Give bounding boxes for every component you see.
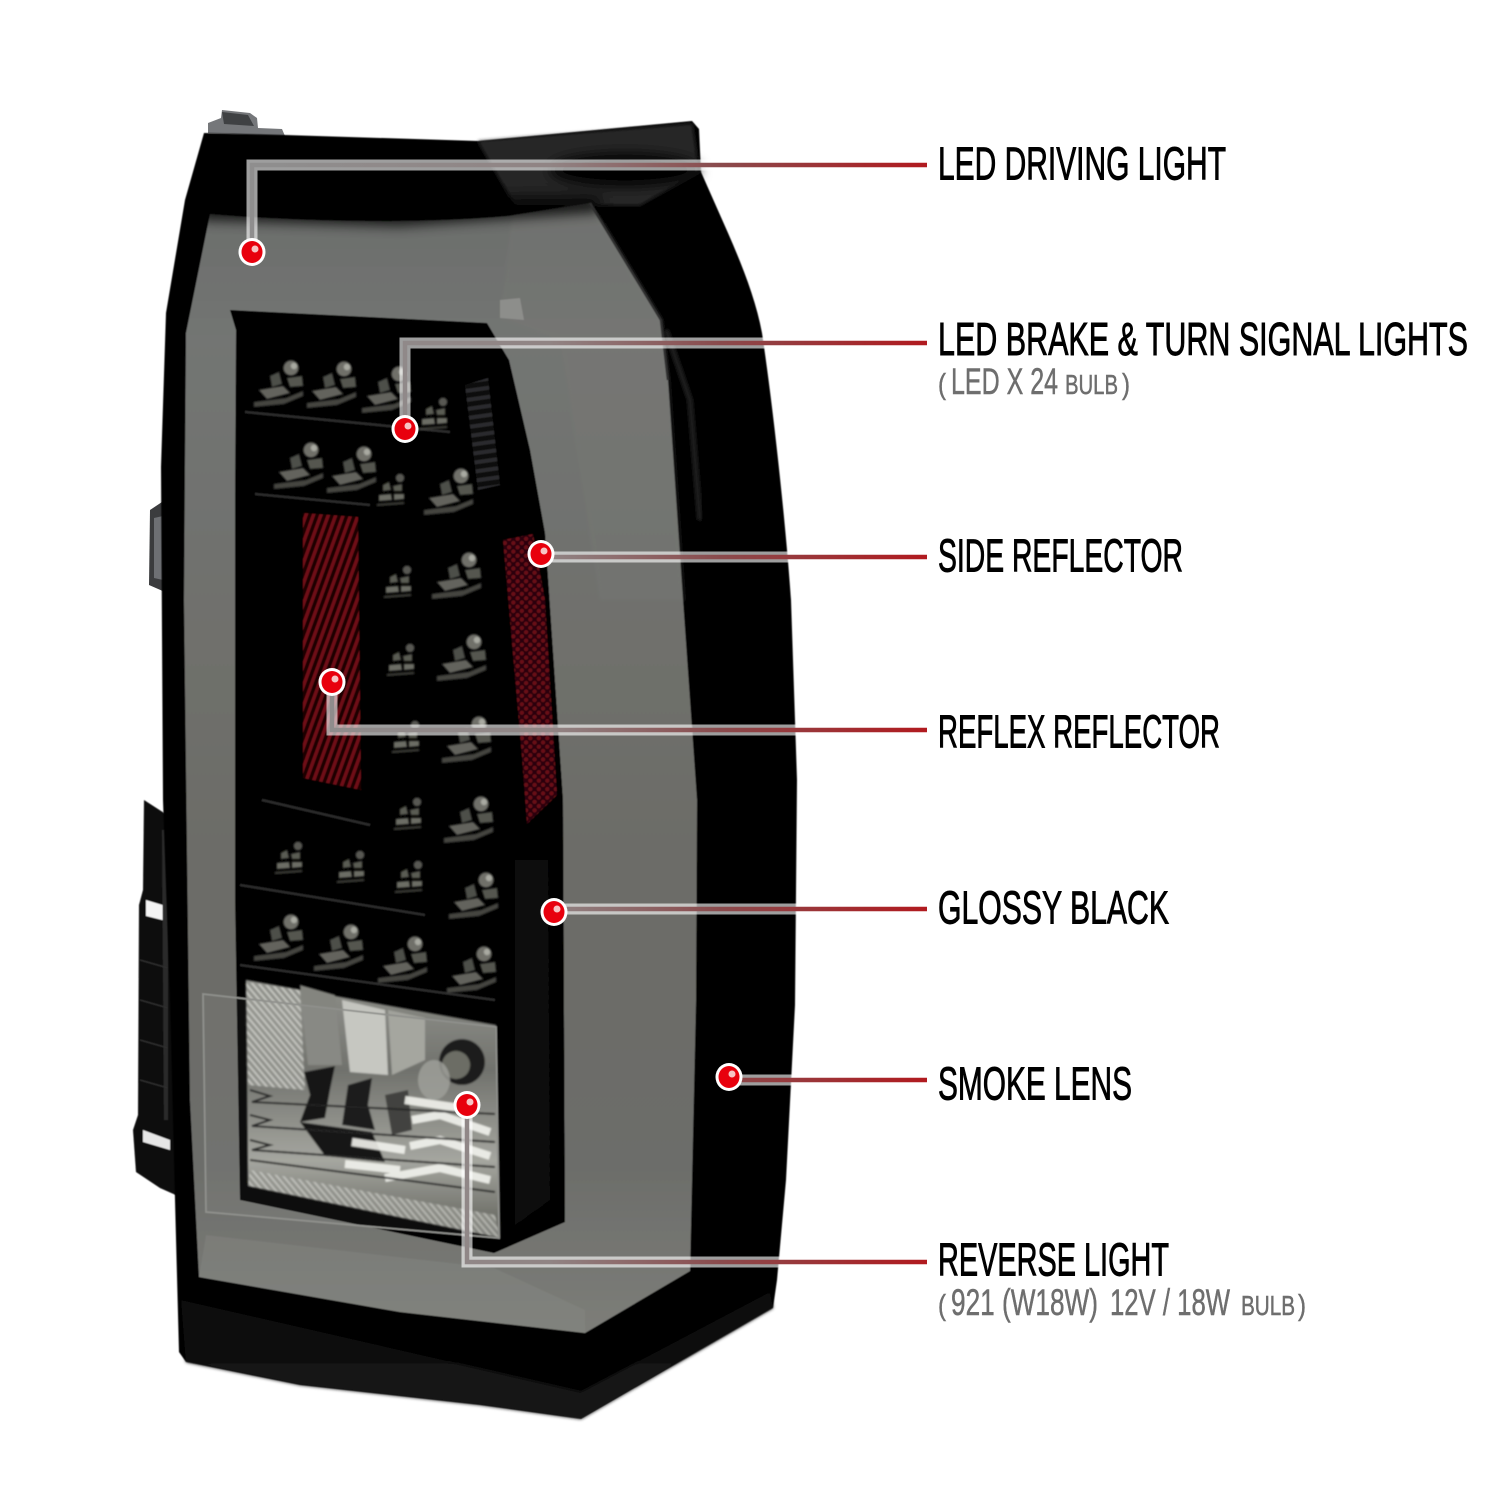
leader line: [565, 904, 927, 914]
sub-label: BULB: [1065, 369, 1118, 400]
sub-label: 12V / 18W: [1110, 1282, 1230, 1323]
left bracket: [133, 800, 178, 1196]
left reflex reflector: [303, 513, 361, 790]
clear lens outline: [203, 994, 499, 1238]
LED clusters: [254, 360, 498, 993]
callout: reflex reflector: [318, 668, 1220, 758]
leader line: [467, 1115, 927, 1262]
callout: side reflector: [528, 530, 1183, 582]
reverse light reflector: [246, 980, 500, 1238]
right side reflector: [503, 534, 557, 824]
lamp outer housing: [161, 121, 797, 1419]
callout: LED driving light: [238, 138, 1226, 266]
callout: LED brake and turn signal lights: [392, 313, 1468, 443]
sub-label: (: [938, 369, 946, 401]
leader line: [332, 692, 927, 730]
leader line: [405, 343, 927, 418]
callout: glossy black: [540, 882, 1169, 934]
leader line: [552, 552, 927, 562]
callout: reverse light: [454, 1091, 1306, 1323]
marker dot: [454, 1091, 480, 1119]
sub-label: BULB: [1241, 1290, 1295, 1321]
label: GLOSSY BLACK: [938, 882, 1169, 934]
sub-label: LED X 24: [951, 361, 1058, 402]
sub-label: ): [1298, 1290, 1306, 1322]
housing gloss: [181, 124, 773, 1419]
side clip: [149, 500, 165, 592]
black centre panel: [235, 312, 565, 1253]
marker dot: [528, 540, 554, 568]
LED cluster dividers: [240, 412, 495, 1000]
marker dot: [238, 238, 266, 266]
marker dot: [540, 898, 568, 926]
marker dot: [318, 668, 346, 696]
sub-label: ): [1122, 369, 1130, 401]
light guide band: [184, 196, 697, 1333]
label: REFLEX REFLECTOR: [938, 706, 1220, 758]
marker dot: [716, 1063, 742, 1091]
lamp body: [161, 121, 797, 1419]
label: REVERSE LIGHT: [938, 1234, 1169, 1286]
top mounting tab: [208, 110, 285, 136]
leader line: [252, 165, 927, 240]
sub-label: (: [938, 1290, 946, 1322]
label: SIDE REFLECTOR: [938, 530, 1183, 582]
leader line: [740, 1074, 927, 1086]
sub-label: 921 (W18W): [951, 1282, 1098, 1323]
marker dot: [392, 415, 418, 443]
label: SMOKE LENS: [938, 1058, 1132, 1110]
callout: smoke lens: [716, 1058, 1132, 1110]
label: LED DRIVING LIGHT: [938, 138, 1226, 190]
sub-label: [938, 1282, 1306, 1323]
rib strips: [465, 378, 550, 1225]
tail light product photo: [133, 110, 797, 1419]
